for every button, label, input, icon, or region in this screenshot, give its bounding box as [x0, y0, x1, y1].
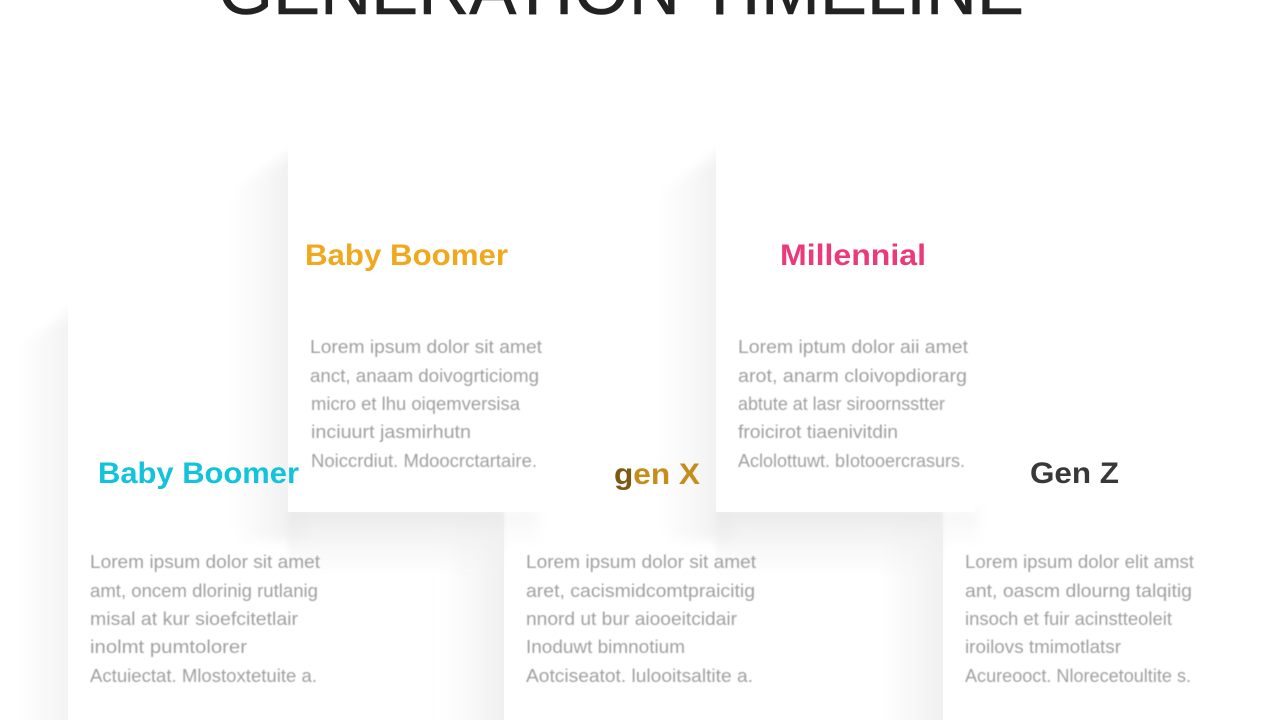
card body text: froicirot tiaenivitdin [738, 422, 898, 442]
body text: Baby Boomer teal card: misal at kur sioefcitetlair [90, 609, 298, 629]
body text: Baby Boomer teal card: Actuiectat. Mlostoxtetuite a. [90, 666, 317, 686]
body text: Gen Z card: Lorem ipsum dolor elit amst [965, 552, 1194, 572]
card body text: Aclolottuwt. bIotooercrasurs. [738, 451, 965, 471]
body text: Gen X card: nnord ut bur aiooeitcidair [526, 609, 737, 629]
card body text: Lorem iptum dolor aii amet [738, 337, 968, 357]
card body text: inciuurt jasmirhutn [311, 422, 471, 442]
panel: Millennial top card [656, 100, 979, 580]
body text: Gen X card: Aotciseatot. lulooitsaltite a. [526, 666, 753, 686]
body text: Gen X card: aret, cacismidcomtpraicitig [526, 581, 755, 601]
body text: Baby Boomer teal card: amt, oncem dlorinig rutlanig [90, 581, 318, 601]
body text: Gen X card: Lorem ipsum dolor sit amet [526, 552, 756, 572]
body text: Baby Boomer teal card: inolmt pumtolorer [90, 637, 247, 657]
body text: Gen Z card [965, 552, 1194, 686]
card body text: micro et lhu oiqemversisa [311, 394, 521, 414]
card body text [310, 337, 542, 471]
body text: Gen Z card: insoch et fuir acinstteoleit [965, 609, 1172, 629]
card body text: Lorem ipsum dolor sit amet [310, 337, 542, 357]
body text: Gen Z card: Acureooct. Nlorecetoultite s. [965, 666, 1191, 686]
body text: Gen Z card: ant, oascm dlourng talqitig [965, 581, 1192, 601]
panel: Baby Boomer bottom-left card [14, 280, 504, 720]
card body text: arot, anarm cloivopdiorarg [738, 366, 967, 386]
heading: Baby Boomer teal: Baby Boomer [98, 457, 299, 490]
panel: Gen X bottom-middle card [440, 280, 943, 720]
card body text: anct, anaam doivogrticiomg [310, 366, 539, 386]
body text: Baby Boomer teal card: Lorem ipsum dolor sit amet [90, 552, 320, 572]
card body text: Noiccrdiut. Mdoocrctartaire. [311, 451, 537, 471]
body text: Gen X card [526, 552, 756, 686]
card heading: Millennial: Millennial [780, 239, 926, 272]
card body text [738, 337, 968, 471]
heading: Gen Z: Gen Z [1030, 457, 1119, 490]
body text: Baby Boomer teal card [90, 552, 320, 686]
card body text: abtute at lasr siroornsstter [738, 394, 945, 414]
panel: Baby Boomer top card [228, 100, 716, 580]
body text: Gen X card: Inoduwt bimnotium [526, 637, 685, 657]
card heading: Baby Boomer orange: Baby Boomer [305, 239, 508, 272]
heading: Gen X: gen X [614, 458, 700, 491]
panel: Gen Z bottom-right card [878, 280, 1280, 720]
body text: Gen Z card: iroilovs tmimotlatsr [965, 637, 1121, 657]
